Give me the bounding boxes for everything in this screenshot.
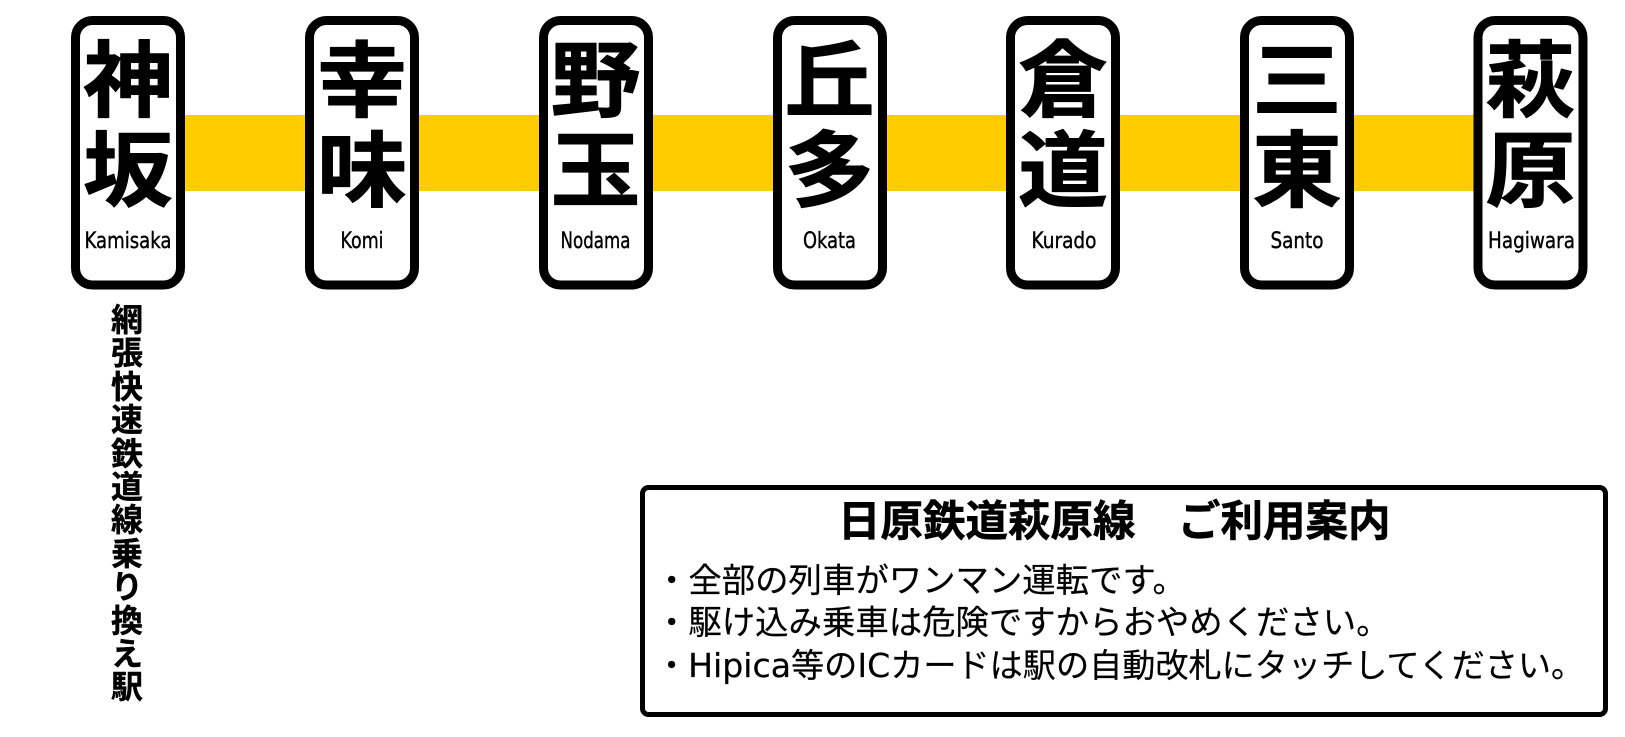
vertical transfer label: 速 (111, 402, 143, 438)
guide line 2: ・駆け込み乗車は危険ですからおやめください。 (655, 603, 1390, 642)
vertical transfer label: り (111, 569, 143, 605)
panel: usage guide (642, 488, 1606, 714)
station sign: Okata: Okata (803, 229, 856, 254)
heading: 日原鉄道萩原線 ご利用案内 (838, 499, 1391, 546)
guide line 1: ・全部の列車がワンマン運転です。 (655, 561, 1186, 600)
station sign: Kamisaka: 神 (83, 36, 173, 128)
yellow line connecting stations (128, 115, 1531, 191)
station sign: Nodama: Nodama (560, 229, 630, 254)
vertical transfer label (111, 302, 143, 705)
vertical transfer label: 鉄 (111, 436, 143, 472)
vertical transfer label: 駅 (111, 669, 143, 705)
station sign: Hagiwara: Hagiwara (1488, 229, 1575, 254)
station sign: Kurado: Kurado (1032, 229, 1096, 254)
vertical transfer label: え (111, 636, 143, 672)
station sign: Santo: 三 (1252, 36, 1342, 128)
vertical transfer label: 張 (111, 335, 143, 371)
station sign: Okata: 多 (785, 126, 874, 218)
vertical transfer label: 道 (111, 469, 143, 505)
vertical transfer label: 網 (111, 302, 143, 338)
station sign: Nodama: 野 (551, 36, 640, 128)
station sign: Komi: Komi (340, 229, 384, 254)
station sign: Okata (778, 20, 882, 285)
station sign: Komi (310, 20, 414, 285)
vertical transfer label: 快 (111, 369, 143, 405)
vertical transfer label: 乗 (111, 536, 143, 572)
station sign: Kurado: 道 (1018, 126, 1108, 218)
station sign: Santo: 東 (1252, 126, 1342, 218)
station sign: Kurado: 倉 (1018, 36, 1108, 128)
guide line 3: ・Hipica等のICカードは駅の自動改札にタッチしてください。 (655, 646, 1584, 685)
station sign: Kamisaka: 坂 (83, 126, 173, 218)
vertical transfer label: 換 (111, 603, 143, 639)
station sign: Hagiwara: 萩 (1486, 36, 1575, 128)
station sign: Santo: Santo (1270, 229, 1324, 254)
vertical transfer label: 線 (111, 502, 143, 538)
station sign: Santo (1244, 20, 1350, 285)
station sign: Nodama (544, 20, 648, 285)
station sign: Kamisaka: Kamisaka (84, 229, 172, 254)
station sign: Komi: 幸 (317, 36, 407, 128)
station sign: Hagiwara (1478, 20, 1583, 285)
station sign: Kamisaka (76, 20, 180, 285)
station sign: Komi: 味 (317, 126, 407, 218)
station sign: Kurado (1010, 20, 1116, 285)
station sign: Okata: 丘 (785, 36, 874, 128)
station sign: Nodama: 玉 (551, 126, 640, 218)
station sign: Hagiwara: 原 (1486, 126, 1575, 218)
